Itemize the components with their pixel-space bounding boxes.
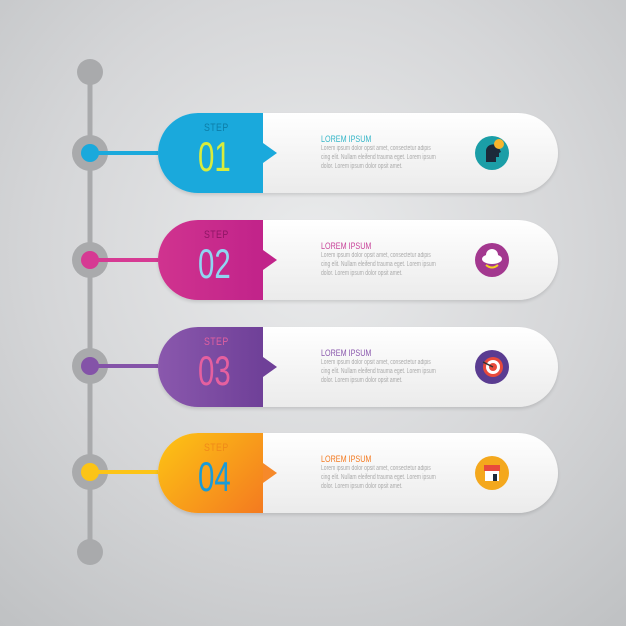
card: step 02: dolor. Lorem ipsum dolor opsit amet. — [321, 270, 403, 277]
card: step 01 — [158, 113, 558, 193]
icon: target — [475, 350, 509, 384]
card: step 04: LOREM IPSUM — [321, 454, 371, 464]
card: step 02: LOREM IPSUM — [321, 241, 371, 251]
card: step 03: 03 — [198, 347, 231, 394]
icon: cloud — [475, 243, 509, 277]
card: step 01: cing elit. Nullam eleifend trauma eget. Lorem ipsum — [321, 154, 436, 161]
card: step 03: cing elit. Nullam eleifend trauma eget. Lorem ipsum — [321, 368, 436, 375]
card: step 02: STEP — [204, 229, 229, 241]
card: step 03: Lorem ipsum dolor opsit amet, consectetur adipis — [321, 359, 431, 366]
card: step 01: dolor. Lorem ipsum dolor opsit amet. — [321, 163, 403, 170]
card: step 01: Lorem ipsum dolor opsit amet, consectetur adipis — [321, 145, 431, 152]
card: step 04: STEP — [204, 442, 229, 454]
card: step 04: dolor. Lorem ipsum dolor opsit amet. — [321, 483, 403, 490]
card: step 02: Lorem ipsum dolor opsit amet, consectetur adipis — [321, 252, 431, 259]
card: step 04: cing elit. Nullam eleifend trauma eget. Lorem ipsum — [321, 474, 436, 481]
icon: head — [475, 136, 509, 170]
card: step 03: dolor. Lorem ipsum dolor opsit amet. — [321, 377, 403, 384]
card: step 04: 04 — [198, 453, 231, 500]
card: step 03: STEP — [204, 336, 229, 348]
card: step 01: LOREM IPSUM — [321, 134, 371, 144]
card: step 04: Lorem ipsum dolor opsit amet, consectetur adipis — [321, 465, 431, 472]
card: step 02: 02 — [198, 240, 231, 287]
icon: shop — [475, 456, 509, 490]
card: step 03 — [158, 327, 558, 407]
card: step 02: cing elit. Nullam eleifend trauma eget. Lorem ipsum — [321, 261, 436, 268]
card: step 01: 01 — [198, 133, 231, 180]
card: step 02 — [158, 220, 558, 300]
card: step 04 — [158, 433, 558, 513]
card: step 03: LOREM IPSUM — [321, 348, 371, 358]
card: step 01: STEP — [204, 122, 229, 134]
